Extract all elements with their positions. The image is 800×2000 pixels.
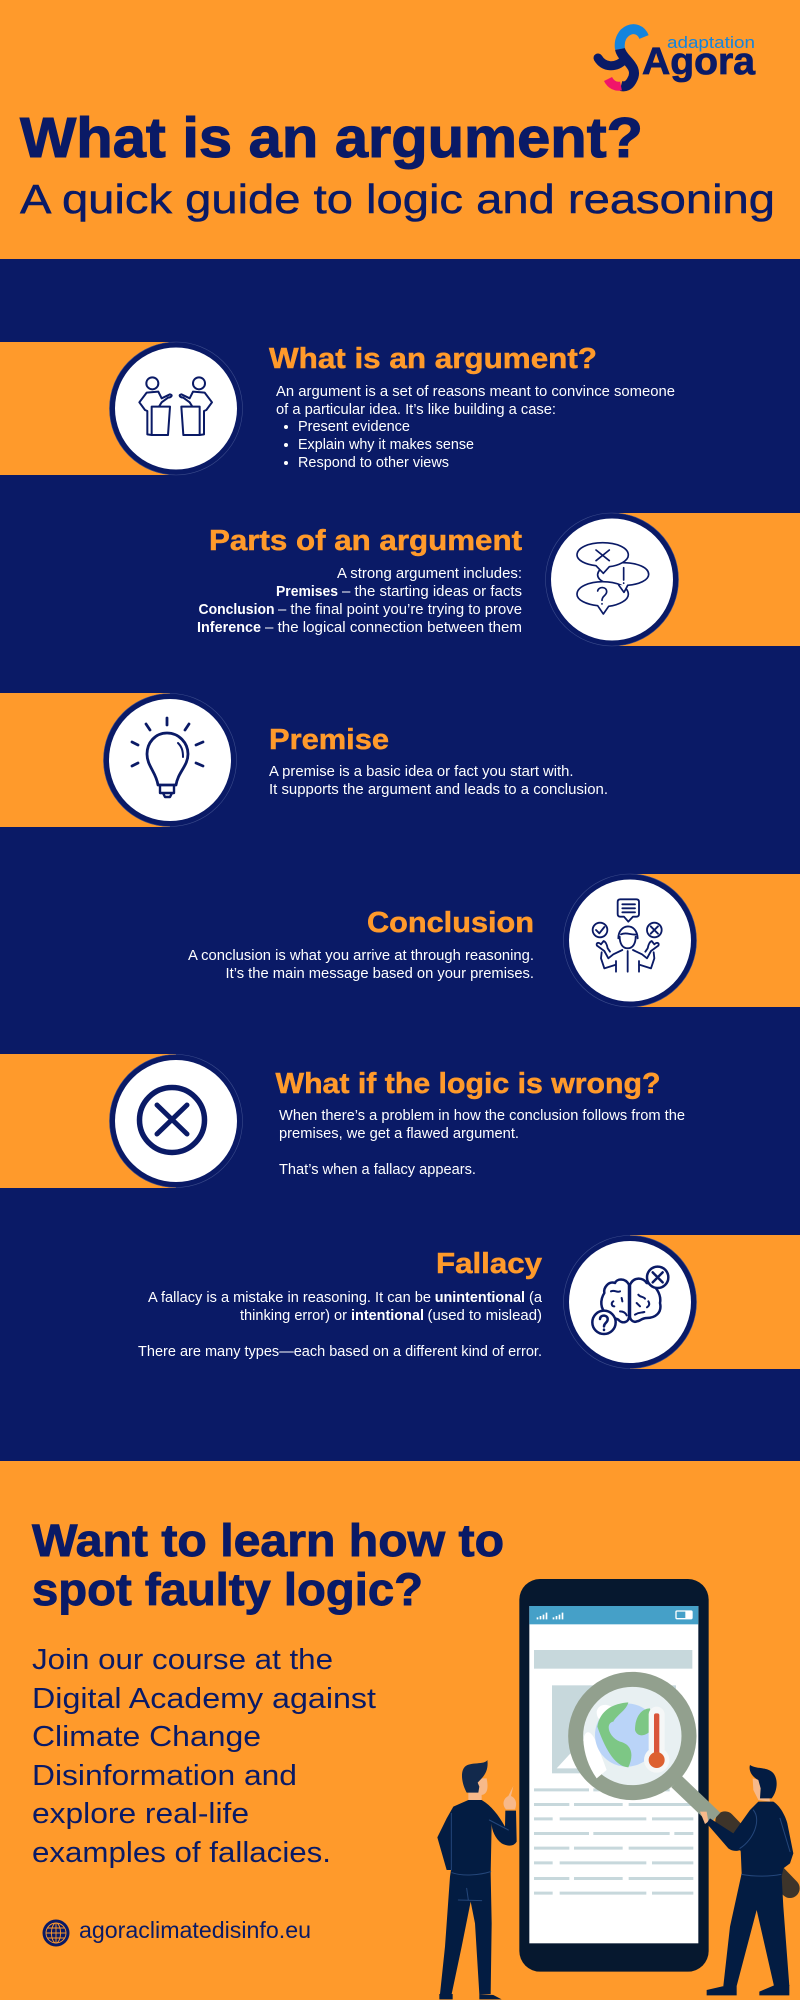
body text: That’s when a fallacy appears. <box>279 1162 476 1178</box>
body text: An argument is a set of reasons meant to convince someone <box>276 384 675 400</box>
body text: When there’s a problem in how the conclusion follows from the <box>279 1108 685 1124</box>
body text: premises, we get a flawed argument. <box>279 1126 519 1142</box>
header panel <box>0 0 800 259</box>
heading: Conclusion <box>367 907 534 939</box>
call to action heading: spot faulty logic? <box>32 1564 423 1615</box>
body text: thinking error) or <box>240 1308 347 1324</box>
call to action text: Digital Academy against <box>32 1683 376 1715</box>
section: what if the logic is wrong <box>0 1054 685 1188</box>
call to action heading <box>32 1515 504 1615</box>
orange band <box>0 693 170 827</box>
body text: There are many types—each based on a different kind of error. <box>138 1344 542 1360</box>
orange band <box>630 1235 800 1369</box>
icon: thinking person <box>564 874 696 1007</box>
body text: A strong argument includes: <box>337 566 522 582</box>
call to action text: Disinformation and <box>32 1760 297 1792</box>
call to action text: explore real-life <box>32 1798 249 1830</box>
body text: Explain why it makes sense <box>298 437 474 453</box>
body text: A conclusion is what you arrive at through reasoning. <box>188 948 534 964</box>
magnifying glass <box>576 1679 790 1888</box>
website link: agoraclimatedisinfo.eu <box>79 1917 311 1943</box>
body text <box>279 1108 685 1178</box>
heading: Fallacy <box>436 1248 542 1280</box>
person left <box>437 1760 517 1999</box>
body text: Conclusion <box>198 602 274 618</box>
icon: globe <box>42 1920 70 1946</box>
body text: (a <box>529 1290 543 1306</box>
navy content panel <box>0 259 800 1461</box>
section: conclusion <box>188 874 800 1007</box>
call to action heading: Want to learn how to <box>32 1515 504 1566</box>
illustration: phone, magnifier and two people <box>437 1579 793 1999</box>
body text: – the final point you’re trying to prove <box>278 602 522 618</box>
body text: unintentional <box>435 1290 525 1306</box>
body text: intentional <box>351 1308 424 1324</box>
orange band <box>0 342 176 475</box>
section: parts of an argument <box>197 513 800 646</box>
icon: light bulb <box>104 694 236 826</box>
logo: Agora <box>642 41 756 83</box>
body text: Present evidence <box>298 419 410 435</box>
body text <box>269 764 608 798</box>
heading: Parts of an argument <box>209 525 522 557</box>
person right <box>700 1765 793 1995</box>
body text <box>138 1290 543 1360</box>
body text <box>188 948 534 982</box>
body text: – the starting ideas or facts <box>342 584 522 600</box>
icon: two debaters at podiums <box>110 342 242 475</box>
orange band <box>630 874 800 1007</box>
call to action text: examples of fallacies. <box>32 1837 331 1869</box>
body text: (used to mislead) <box>428 1308 542 1324</box>
section: premise <box>0 693 608 827</box>
orange band <box>0 1054 176 1188</box>
body text <box>276 384 675 471</box>
section: fallacy <box>138 1235 800 1369</box>
icon: crossed circle <box>110 1054 242 1188</box>
body text: – the logical connection between them <box>265 620 522 636</box>
heading: What if the logic is wrong? <box>276 1068 660 1100</box>
footer panel <box>0 1461 800 2000</box>
body text: of a particular idea. It’s like building a case: <box>276 402 556 418</box>
icon: brain with marks <box>564 1236 696 1368</box>
heading: What is an argument? <box>269 343 597 375</box>
body text <box>197 566 522 636</box>
call to action text: Join our course at the <box>32 1644 333 1676</box>
body text: A premise is a basic idea or fact you start with. <box>269 764 574 780</box>
section: what is an argument <box>0 342 675 475</box>
title: What is an argument? <box>20 106 643 170</box>
body text: Respond to other views <box>298 455 449 471</box>
body text: A fallacy is a mistake in reasoning. It can be <box>148 1290 431 1306</box>
logo <box>598 29 756 86</box>
body text: It supports the argument and leads to a conclusion. <box>269 782 608 798</box>
body text: Inference <box>197 620 261 636</box>
heading: Premise <box>269 724 389 756</box>
phone <box>519 1579 709 1972</box>
call to action text <box>32 1644 376 1869</box>
body text: It’s the main message based on your premises. <box>226 966 534 982</box>
call to action text: Climate Change <box>32 1721 261 1753</box>
icon: speech bubbles <box>546 513 678 646</box>
subtitle: A quick guide to logic and reasoning <box>20 176 775 222</box>
logo: adaptation <box>667 33 755 52</box>
orange band <box>612 513 800 646</box>
body text: Premises <box>276 584 338 600</box>
